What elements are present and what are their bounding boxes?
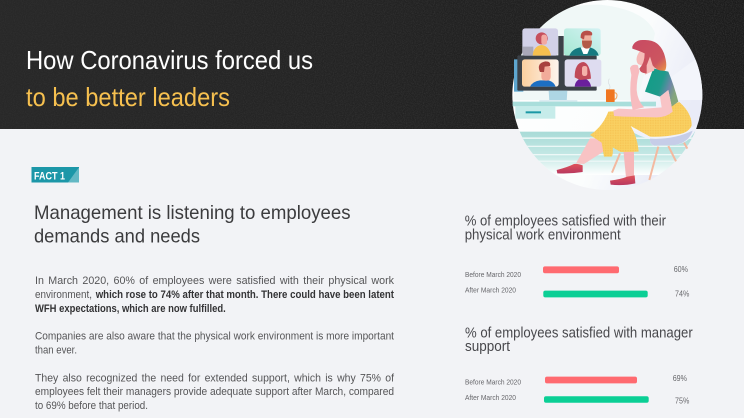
chart heading: support (465, 339, 510, 355)
row: before March 2020 (465, 265, 688, 279)
text block: paragraph 3: to 69% before that period. (35, 400, 148, 412)
desk (513, 102, 656, 119)
row: before March 2020 (465, 374, 687, 387)
chair (612, 124, 697, 180)
title: How Coronavirus forced us (26, 45, 313, 75)
row: before March 2020: Before March 2020 (465, 270, 521, 279)
chart heading (465, 214, 666, 244)
tile: man in blue (522, 59, 559, 87)
illustration: woman on video call (510, 0, 707, 190)
tile: woman with yellow top (522, 28, 558, 56)
icon: orange mug (606, 79, 617, 102)
row: after March 2020: After March 2020 (465, 393, 516, 402)
chart heading: % of employees satisfied with manager (465, 325, 693, 341)
badge: FACT 1: FACT 1 (34, 170, 65, 182)
row: after March 2020 (465, 286, 689, 299)
text block: paragraph 1 (35, 275, 395, 315)
neck and face (636, 45, 657, 75)
chart: physical work environment (465, 214, 689, 299)
heading: management: Management is listening to employees (34, 202, 351, 224)
row: after March 2020: 74% (675, 290, 689, 299)
monitor with video tiles (514, 28, 601, 102)
woman (557, 40, 692, 185)
text block: paragraph 1: In March 2020, 60% of employees were satisfied with their physical work (35, 275, 395, 287)
text block: paragraph 2 (35, 331, 394, 356)
text block: paragraph 3: They also recognized the need for extended support, which is why 75% of (35, 372, 394, 384)
title: to be better leaders (26, 82, 230, 112)
near leg (623, 150, 634, 177)
title (26, 45, 313, 112)
text block: paragraph 1: environment, (35, 289, 92, 301)
chart heading: physical work environment (465, 228, 621, 244)
arm to knee (613, 90, 673, 117)
badge: FACT 1 (32, 167, 79, 182)
skirt (590, 102, 692, 157)
header band (0, 0, 744, 129)
text block: paragraph 2: than ever. (35, 344, 77, 356)
heading: management (34, 202, 351, 248)
tile: woman in purple (565, 59, 601, 87)
text block: paragraph 1: which rose to 74% after that month. There could have been latent (95, 289, 394, 301)
chart heading: % of employees satisfied with their (465, 214, 666, 230)
shoes (557, 164, 583, 173)
heading: management: demands and needs (34, 226, 200, 248)
row: before March 2020: 60% (674, 265, 688, 274)
row: before March 2020: Before March 2020 (465, 378, 521, 387)
tile: bearded man (564, 28, 601, 56)
chart heading (465, 325, 693, 355)
text block: paragraph 3: employees felt their managers provide adequate support after March, compared (35, 386, 394, 398)
text block: paragraph 1: WFH expectations, which are now fulfilled. (35, 303, 226, 315)
row: after March 2020 (465, 393, 689, 405)
far leg (576, 138, 605, 164)
hair (632, 40, 666, 73)
arm to chin (630, 65, 644, 110)
row: after March 2020: 75% (675, 396, 689, 405)
text block: paragraph 2: Companies are also aware that the physical work environment is more important (35, 331, 394, 343)
chart: manager support (465, 325, 693, 405)
text block: paragraph 3 (35, 372, 394, 412)
torso and shirt (645, 68, 678, 107)
row: after March 2020: After March 2020 (465, 286, 516, 295)
row: before March 2020: 69% (673, 374, 687, 383)
floor (520, 132, 695, 175)
